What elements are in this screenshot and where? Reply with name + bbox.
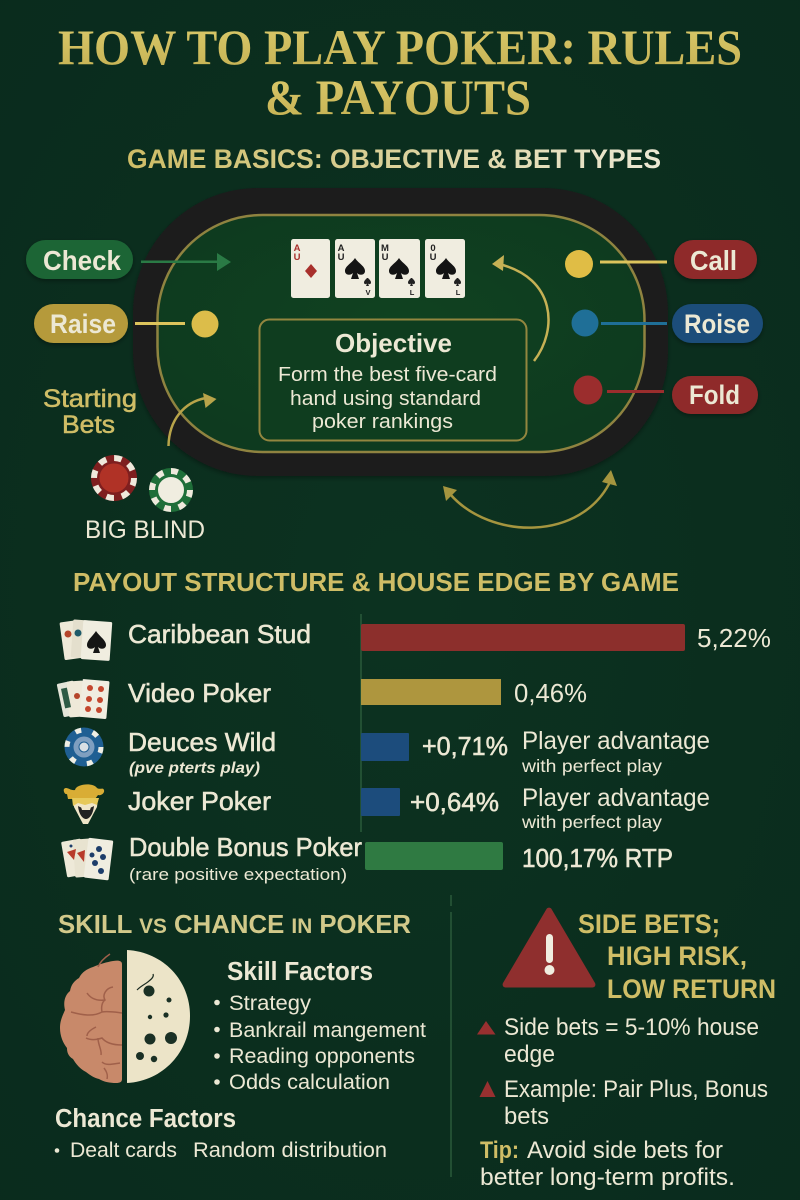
icon: cards (59, 619, 112, 661)
icon: cards (61, 838, 113, 880)
card: ace of spades: U (338, 252, 345, 263)
bullet: example: bets (504, 1103, 549, 1130)
table rail (133, 188, 668, 476)
callout: objective: Form the best five-card (278, 363, 497, 386)
label: roise with marker (572, 304, 763, 343)
text block: skill factors: Reading opponents (229, 1044, 415, 1068)
row: deuces wild: with perfect play (521, 756, 662, 776)
bullet: house edge: edge (504, 1041, 555, 1068)
text block: skill factors: Odds calculation (229, 1070, 390, 1094)
brain: speckled half (127, 950, 190, 1083)
text block: side bet facts (477, 1014, 768, 1130)
card: ace of spades: V (365, 288, 371, 297)
label: raise with marker: Raise (50, 309, 116, 339)
card: spade 3: M (381, 243, 389, 254)
card: queen of spades: U (430, 252, 437, 263)
row: caribbean stud: Caribbean Stud (128, 619, 311, 649)
row: deuces wild: Deuces Wild (128, 727, 276, 757)
row: joker poker (64, 784, 710, 832)
bullet: example: Example: Pair Plus, Bonus (504, 1076, 768, 1103)
row: caribbean stud (59, 619, 771, 661)
label: starting bets: Starting (43, 385, 137, 413)
chart axis (360, 614, 362, 832)
table felt (158, 215, 644, 452)
icon: green chip (149, 468, 193, 512)
heading: side bets: HIGH RISK, (607, 941, 747, 971)
row: video poker: 0,46% (514, 680, 587, 708)
label: call with marker (565, 240, 757, 279)
callout: tip: better long-term profits. (480, 1164, 735, 1191)
title: & PAYOUTS (265, 69, 531, 125)
text block: chance factors: Random distribution (193, 1139, 387, 1162)
text block: chance factors (55, 1105, 387, 1162)
row: double bonus poker (61, 832, 673, 884)
callout: tip (480, 1137, 735, 1191)
row: deuces wild (64, 727, 710, 777)
row: deuces wild: +0,71% (422, 733, 508, 761)
callout: objective: hand using standard (290, 387, 481, 410)
text block: skill factors (214, 958, 426, 1094)
row: joker poker: Player advantage (522, 784, 710, 812)
card: ace of diamonds (291, 239, 330, 298)
label: big blind: BIG BLIND (85, 516, 205, 544)
text block: chance factors: Dealt cards (70, 1139, 177, 1162)
row: double bonus poker: Double Bonus Poker (129, 832, 362, 862)
arrow: bottom curved double arrow (443, 470, 617, 528)
label: fold with marker: Fold (689, 380, 740, 410)
bullet: house edge: Side bets = 5-10% house (504, 1014, 759, 1041)
icon: brain split (60, 950, 190, 1083)
card: spade 3: U (382, 252, 389, 263)
heading: side bets: SIDE BETS; (578, 909, 720, 939)
heading: side bets: LOW RETURN (607, 974, 776, 1004)
text block: skill factors: Bankrail mangement (229, 1018, 426, 1042)
text block: skill factors: Strategy (229, 991, 311, 1015)
card: ace of diamonds: A (294, 243, 301, 254)
title: HOW TO PLAY POKER: RULES (58, 19, 742, 75)
cards on table (291, 239, 465, 298)
card: ace of diamonds: U (294, 252, 301, 263)
label: starting bets (43, 385, 137, 439)
label: check with arrow: Check (43, 245, 121, 276)
title (58, 19, 742, 125)
label: fold with marker (574, 376, 758, 414)
callout: objective (260, 320, 526, 440)
label: roise with marker: Roise (684, 309, 750, 339)
card: spade 3 (379, 239, 420, 298)
row: video poker (57, 678, 587, 719)
row: video poker: Video Poker (128, 678, 271, 708)
row: joker poker: with perfect play (521, 812, 662, 832)
callout: objective: Objective (335, 328, 452, 358)
label: call with marker: Call (690, 245, 737, 276)
label: raise with marker (34, 304, 218, 343)
icon: warning triangle (503, 908, 595, 988)
card: queen of spades: 0 (430, 243, 436, 254)
row: joker poker: Joker Poker (128, 786, 271, 816)
card: ace of spades: A (338, 243, 345, 254)
card: spade 3: L (410, 288, 415, 297)
row: deuces wild: (pve pterts play) (129, 760, 260, 777)
card: ace of spades (335, 239, 375, 298)
bullet: example (480, 1076, 768, 1130)
label: starting bets: Bets (62, 411, 115, 439)
icon: joker (64, 784, 104, 824)
panel: payout chart (57, 614, 771, 884)
heading: skill vs chance: SKILL VS CHANCE IN POKER (58, 909, 411, 939)
card: queen of spades (425, 239, 465, 298)
heading: game basics: GAME BASICS: OBJECTIVE & BET TYPES (127, 144, 661, 174)
arrow: starting bets to table (168, 393, 216, 446)
row: deuces wild: Player advantage (522, 727, 710, 755)
callout: tip: Tip: (480, 1137, 519, 1164)
text block: chance factors: Chance Factors (55, 1105, 236, 1133)
row: joker poker: +0,64% (410, 789, 499, 817)
icon: red chip (91, 455, 137, 501)
icon: cards (57, 679, 110, 719)
icon: blue chip (64, 728, 104, 766)
text block: skill factors: Skill Factors (227, 958, 373, 986)
row: double bonus poker: 100,17% RTP (522, 845, 673, 873)
arrow: objective to cards (492, 255, 549, 361)
callout: objective: poker rankings (312, 410, 453, 433)
panel: poker table (133, 188, 668, 476)
bullet: house edge (477, 1014, 759, 1068)
card: queen of spades: L (456, 288, 461, 297)
callout: tip: Avoid side bets for (527, 1137, 723, 1164)
row: caribbean stud: 5,22% (697, 625, 771, 653)
heading: side bets (578, 909, 776, 1004)
heading: payout structure: PAYOUT STRUCTURE & HOUSE EDGE BY GAME (73, 569, 679, 597)
label: check with arrow (26, 240, 231, 279)
row: double bonus poker: (rare positive expectation) (129, 865, 347, 884)
brain: organic half (60, 954, 122, 1083)
